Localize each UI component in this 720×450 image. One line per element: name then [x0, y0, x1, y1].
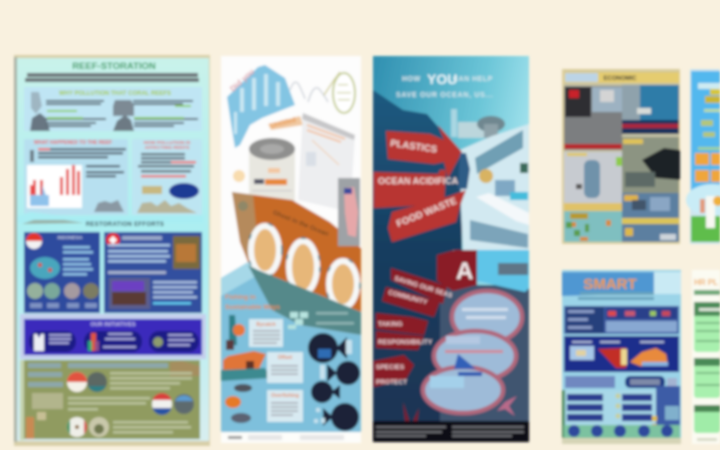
heading: pollution efforts: [17, 212, 204, 228]
heading: [694, 278, 720, 295]
intro text: [25, 73, 199, 82]
footer: [373, 421, 529, 442]
panel: pale row 3: [565, 376, 677, 388]
heading bar: ECONOMIC: [604, 76, 637, 82]
banner labels: OCEAN ACIDIFICA: [378, 176, 459, 186]
panel: lower sea: [221, 262, 361, 432]
callout: green ring: [333, 73, 355, 113]
figure: caped hero: [458, 153, 470, 189]
poster: green right edge: [692, 270, 720, 444]
panel: blue boxes: [622, 193, 679, 242]
illustration: paper sheet chart: [298, 113, 355, 212]
pink starfish: [497, 396, 517, 416]
lower banners: [374, 250, 477, 387]
title: smart: SMART: [583, 276, 637, 293]
card: info 3: Overfishing: [271, 393, 299, 399]
card: info 3: [267, 390, 303, 422]
poster: bright green right edge: [686, 69, 720, 244]
illustration: red banner arrows: [374, 125, 466, 242]
icons row: [564, 425, 680, 438]
panel: coral effects right: HOW POLLUTION IS: [144, 140, 191, 146]
title: SAVE OUR OCEAN, US...: [396, 92, 493, 99]
poster: economics collage: [562, 69, 680, 244]
banner text: SPECIES: [376, 364, 405, 371]
illustration: ship hull: [232, 192, 361, 312]
banner text: [376, 275, 454, 386]
title: reef-storation: REEF-STORATION: [72, 61, 156, 72]
icon: plastic bag: [34, 334, 44, 351]
card: info 2: [267, 352, 303, 383]
card: info 1: Bycatch: [256, 322, 276, 328]
banner text: COMMUNITY: [387, 289, 429, 306]
heading bar: [564, 72, 679, 83]
heading: orange sea title: [225, 294, 280, 311]
chart line: [290, 82, 328, 102]
callout: blue speech bubble: [169, 183, 199, 199]
figure: diver: [26, 417, 34, 439]
heading: pollution efforts: RESTORATION EFFORTS: [86, 222, 164, 228]
banner labels: PLASTICS: [390, 138, 438, 156]
illustration: ship hull: Ghost in the Ocean: [272, 209, 330, 238]
icon: can: [153, 337, 163, 347]
icon: indonesia flag: [67, 372, 87, 392]
panel: coral effects left: WHAT HAPPENED TO THE REEF: [34, 140, 112, 146]
icon: bottles: [88, 333, 99, 351]
illustration: person card: [338, 178, 360, 246]
footer: [221, 432, 361, 443]
label: teal drops: [288, 312, 308, 329]
card: info 1: [249, 319, 283, 347]
section 2: [694, 358, 720, 398]
panel: blue sea: [622, 85, 679, 134]
title: wave of plastic: [227, 65, 295, 148]
panel: gray city: [564, 86, 622, 150]
illustration: polluted shore collage: [460, 124, 529, 250]
panel: blue row 1: [564, 306, 679, 334]
illustration: fisher on boat: [221, 315, 271, 381]
panel: bottle: [564, 152, 622, 203]
poster: ocean pollution ship: Untitled: [270, 117, 297, 130]
icon: mexico flag: [67, 417, 87, 437]
poster: ocean pollution ship: [221, 56, 361, 443]
panel: coral effects right: AFFECTING REEFS: [145, 145, 190, 151]
illustration: lifebuoys: [251, 226, 357, 307]
title: HOW: [402, 76, 421, 83]
panel: yellow strip: [564, 203, 622, 242]
panel: coral effects right: [132, 139, 202, 215]
dark sea left: [373, 90, 462, 421]
title: [396, 71, 493, 99]
fish icons right: [308, 333, 360, 431]
illustration: city tower: [451, 109, 505, 138]
poster: reef-storation: [14, 55, 210, 446]
heading: [698, 83, 720, 103]
panel: why pollution threatens coral reefs: [24, 87, 202, 131]
panel: indonesia: INDONESIA: [57, 235, 83, 240]
poster: how you can help save our oceans: [373, 56, 529, 442]
poster: smart: [562, 270, 681, 444]
banner labels: [378, 138, 459, 230]
badge green: [616, 157, 632, 166]
heading: pink label: Did you: [228, 67, 256, 93]
banner labels: FOOD WASTE: [395, 196, 458, 230]
panel: purple solutions band: [20, 314, 206, 359]
panel: olive case studies: [20, 360, 200, 440]
letter A: A: [456, 258, 473, 285]
panel: why pollution threatens coral reefs: WHY POLLUTION THAT CORAL REEFS: [59, 91, 171, 97]
banner text: RESPONSIBILITY: [378, 339, 433, 346]
title: YOU: [427, 71, 457, 87]
banner text: PROTECT: [376, 379, 407, 386]
panel: blue row 2: [564, 336, 679, 372]
orange cells: [695, 153, 720, 182]
heading: orange sea title: Sustainable Ways: [225, 304, 280, 311]
icon: swiss flag: [106, 233, 120, 247]
icon: indonesia flag: [26, 233, 42, 249]
fragments in ring: [430, 308, 508, 388]
heading: HR PL: [694, 278, 718, 287]
icon: orange doodle: [233, 170, 245, 182]
heading: orange sea title: Fishing in: [225, 294, 256, 301]
panel: purple solutions band: OUR INITIATIVES: [90, 322, 136, 328]
panel: indonesia: [24, 232, 100, 313]
banner text: SAVING OUR SEAS: [393, 275, 454, 300]
label: orange tag: [268, 116, 303, 130]
banner text: TAKING: [378, 321, 402, 328]
right ocean: [473, 250, 529, 292]
panel: dark machine: [622, 137, 680, 193]
panel: coral effects left: [24, 139, 128, 215]
icon: netherlands flag: [152, 393, 172, 415]
section 1: [694, 302, 720, 352]
panel: switzerland: [104, 232, 202, 313]
title: CAN HELP: [453, 76, 493, 83]
panel: row 4: [564, 390, 656, 430]
illustration: product tub: [249, 138, 295, 203]
section 3: [694, 405, 720, 433]
panel: coral side: [652, 386, 680, 438]
scene: [686, 184, 720, 216]
illustration: red S banner ring: [423, 291, 522, 413]
card: info 2: Offset: [278, 355, 293, 361]
chart: bleaching bars: [27, 165, 82, 208]
fish icons left: [225, 384, 252, 423]
labels: [701, 109, 720, 137]
